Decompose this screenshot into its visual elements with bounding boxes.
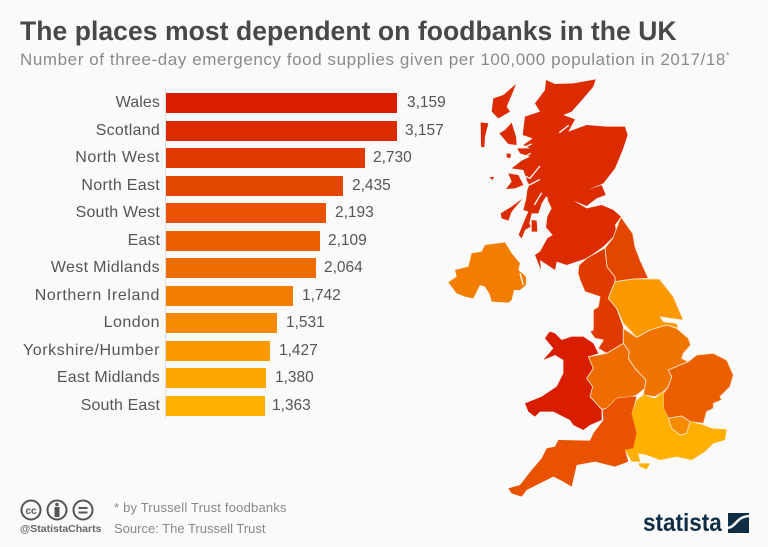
region: Wales	[525, 332, 602, 430]
bar: Yorkshire/Humber: Yorkshire/Humber	[23, 342, 160, 358]
licence icons	[20, 500, 94, 520]
bar: North East: 2,435	[352, 176, 391, 194]
region: Scotland	[481, 79, 628, 270]
source: Source: The Trussell Trust	[114, 521, 266, 536]
footnote: * by Trussell Trust foodbanks	[114, 500, 287, 515]
bar: North West: 2,730	[373, 149, 412, 166]
bar: East	[128, 231, 367, 251]
bar: West Midlands: West Midlands	[51, 259, 160, 276]
region: London	[668, 416, 690, 435]
bar: South West	[76, 203, 374, 223]
bar: South East	[81, 396, 311, 416]
icon: person	[48, 500, 66, 520]
subtitle: Number of three-day emergency food supplies given per 100,000 population in 2017/18*	[20, 50, 730, 69]
icon: cc: cc	[25, 506, 37, 517]
handle: @StatistaCharts	[20, 523, 101, 535]
bar: North East: North East	[81, 176, 160, 194]
bar: West Midlands: 2,064	[324, 259, 363, 276]
bar: East Midlands: East Midlands	[57, 369, 160, 386]
bar: London	[104, 313, 325, 333]
bar: Northern Ireland: Northern Ireland	[35, 286, 160, 304]
bar: Scotland	[96, 121, 444, 141]
bar: South East: 1,363	[272, 396, 311, 414]
region: North East	[605, 217, 648, 282]
bar: Wales: Wales	[116, 94, 160, 111]
bar: Northern Ireland: 1,742	[302, 286, 341, 304]
bar: West Midlands	[51, 258, 363, 278]
England and Wales regions	[508, 217, 733, 497]
bar: Yorkshire/Humber: 1,427	[279, 342, 318, 358]
bar: East: 2,109	[328, 232, 367, 248]
bar: South West: South West	[76, 204, 160, 221]
region: East Midlands	[623, 325, 691, 397]
bar: Wales	[116, 93, 446, 113]
bar chart	[23, 89, 446, 418]
region: Northern Ireland	[448, 242, 526, 303]
bar: Northern Ireland	[35, 286, 341, 306]
title: The places most dependent on foodbanks in the UK	[20, 16, 677, 46]
bar: East: East	[128, 232, 160, 248]
bar: South East: South East	[81, 396, 160, 414]
statista logo: statista	[643, 509, 722, 537]
bar: Yorkshire/Humber	[23, 341, 318, 361]
icon: statista mark	[728, 513, 749, 533]
bar: London: 1,531	[286, 314, 325, 331]
region: Yorkshire/Humber	[608, 279, 683, 337]
region: East	[663, 353, 733, 423]
sea lochs on the Scottish coast	[520, 125, 569, 207]
region: South East	[625, 392, 727, 462]
bar: East Midlands: 1,380	[275, 369, 314, 386]
bar: London: London	[104, 314, 160, 331]
bar: Wales: 3,159	[407, 94, 446, 111]
bar: North East	[81, 176, 391, 196]
region: West Midlands	[587, 343, 646, 409]
bar: Scotland: 3,157	[405, 122, 444, 138]
region: South West	[508, 397, 637, 497]
region: North West	[578, 248, 623, 353]
bar: East Midlands	[57, 368, 314, 388]
icon: equals	[74, 500, 92, 520]
bar: South West: 2,193	[335, 204, 374, 221]
bar: North West: North West	[75, 149, 160, 166]
bar: Scotland: Scotland	[96, 122, 160, 138]
bar: North West	[75, 148, 412, 168]
